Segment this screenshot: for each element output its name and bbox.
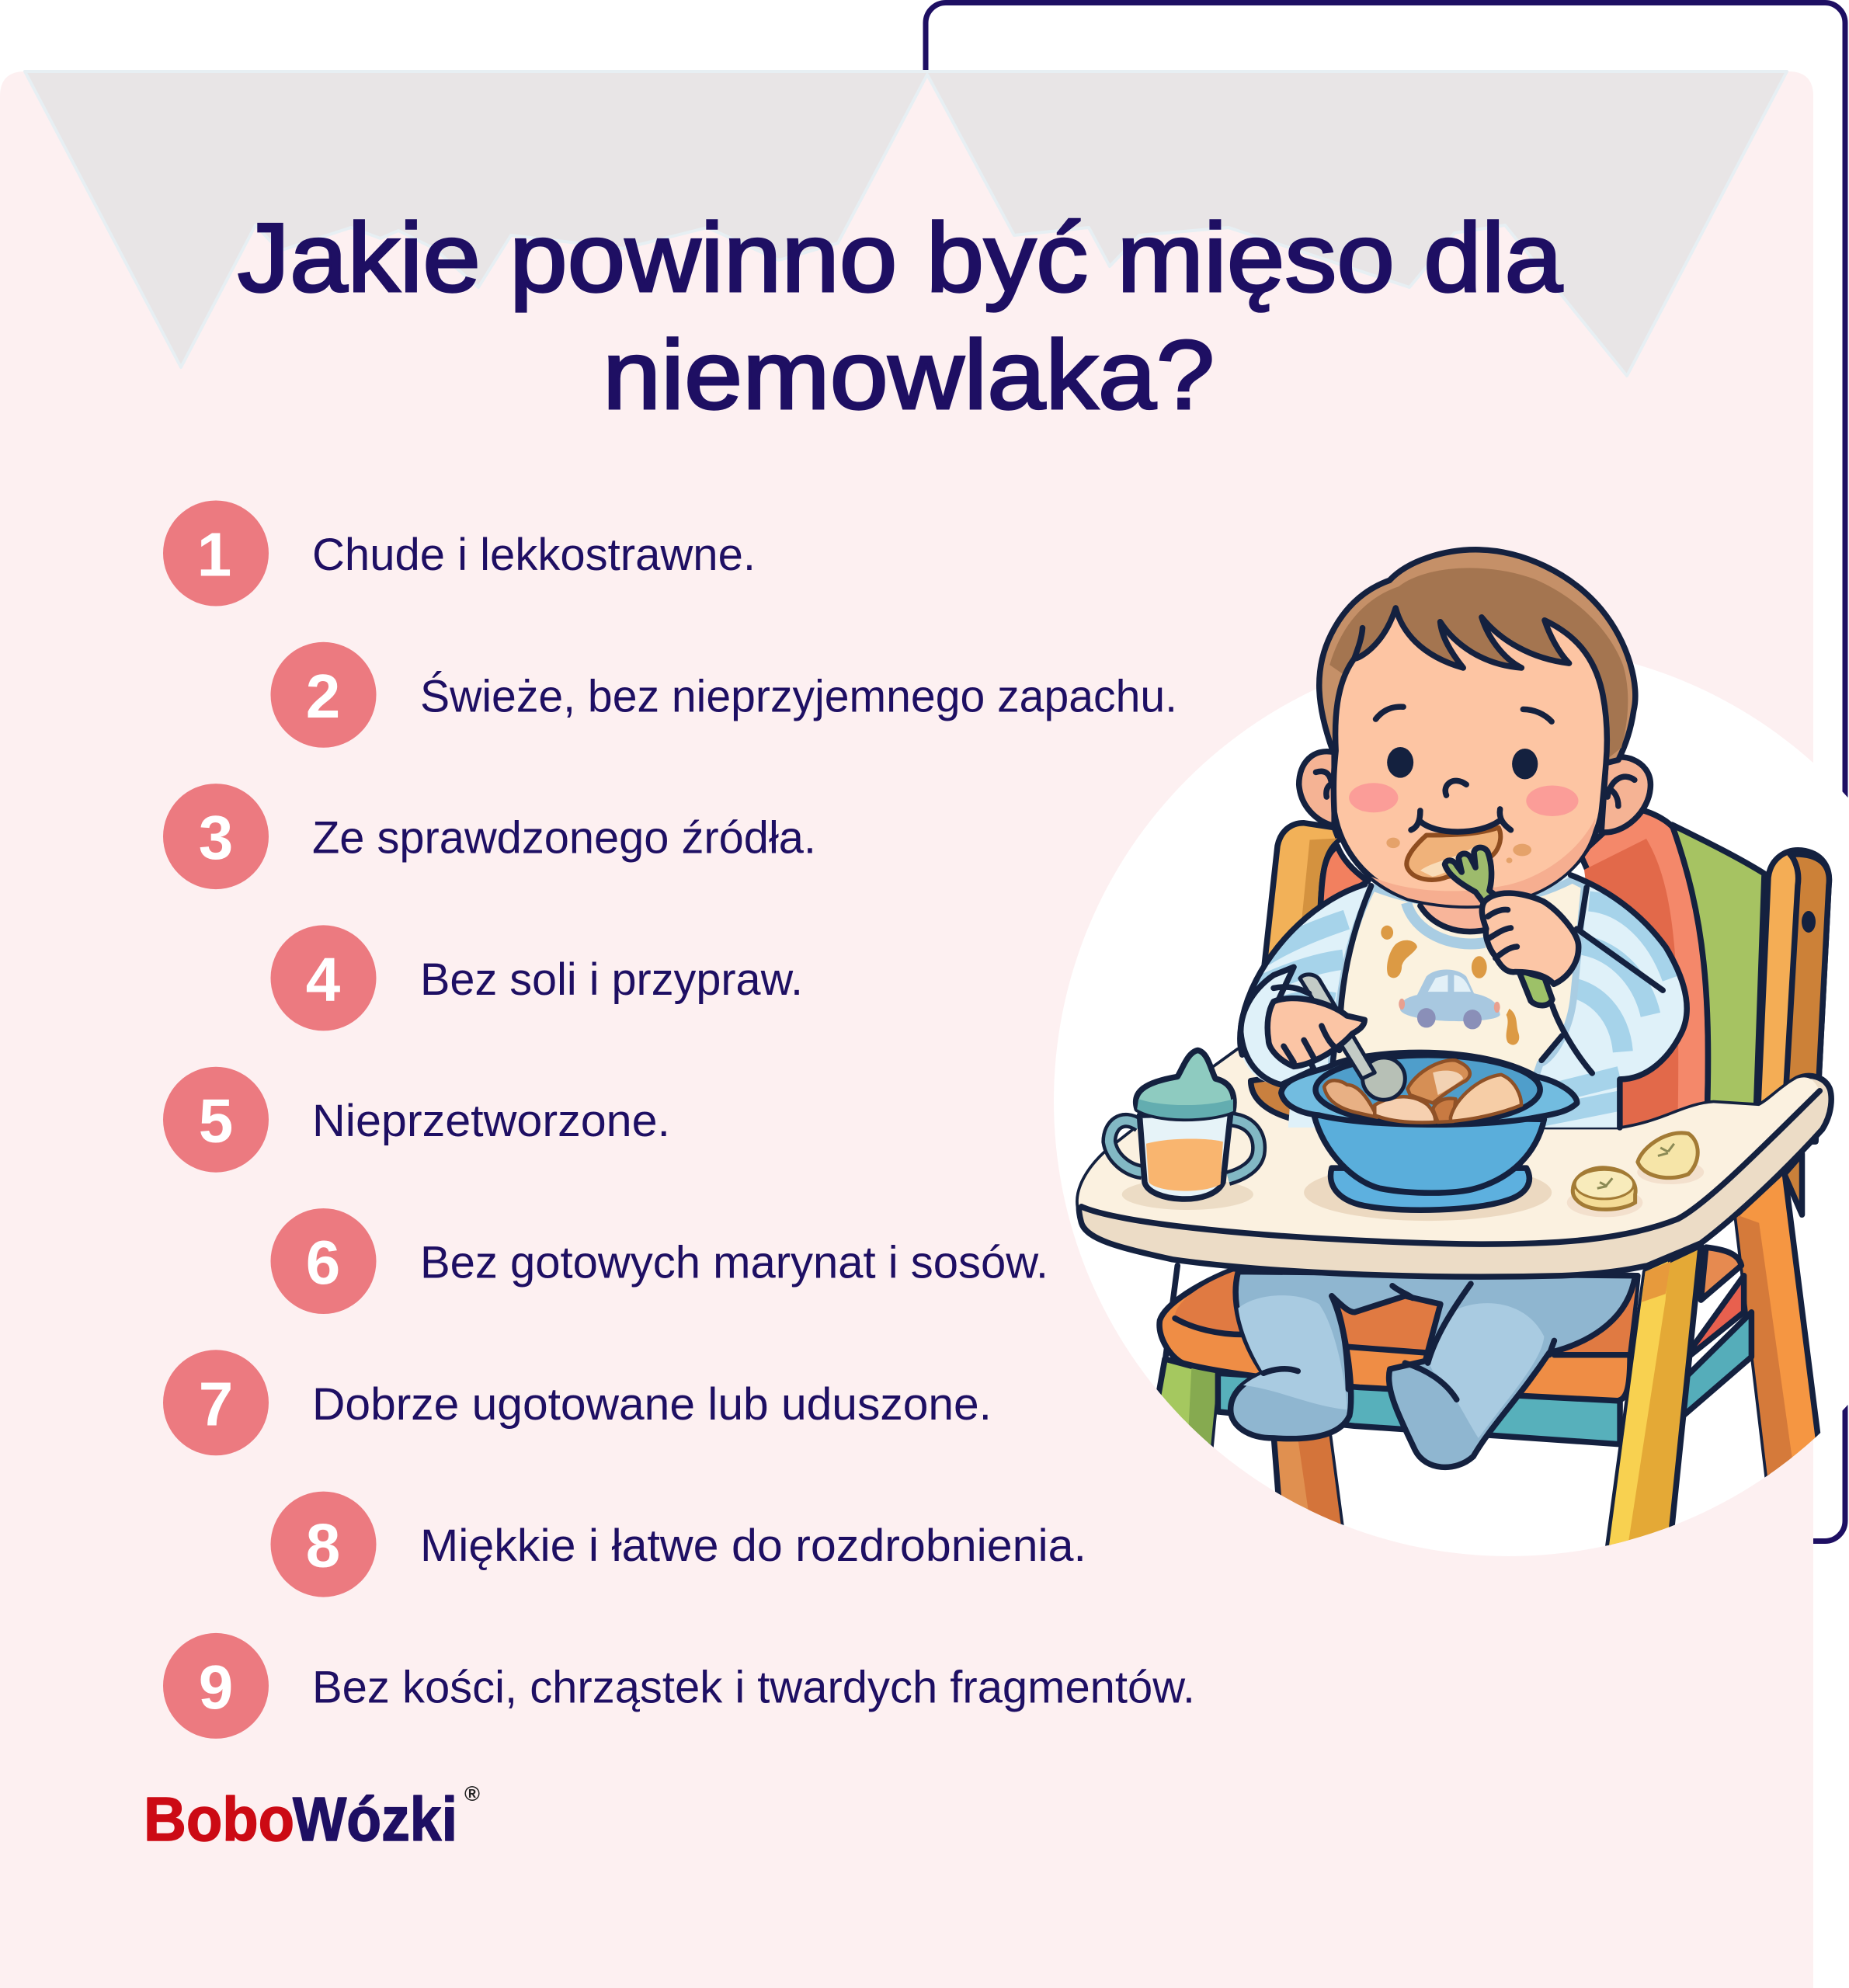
rear left leg (1157, 1266, 1218, 1451)
crumbs (1386, 838, 1531, 863)
logo: BoboWózki (144, 1782, 480, 1854)
rear right leg (1736, 1154, 1819, 1491)
bowl rim (1281, 1052, 1577, 1124)
list item 1: 1 (197, 520, 231, 589)
list item 1 (163, 500, 756, 606)
food in mouth (1406, 828, 1500, 880)
bowl base (1331, 1168, 1529, 1210)
list item 3 (163, 784, 816, 889)
tray (1079, 1050, 1831, 1277)
list item 4: Bez soli i przypraw. (420, 954, 803, 1005)
list item 4: 4 (306, 944, 341, 1013)
list item 6: Bez gotowych marynat i sosów. (420, 1238, 1048, 1288)
list item 5 (163, 1067, 670, 1173)
chair legs, seat and baby legs (1157, 1154, 1819, 1552)
list item 8: Miękkie i łatwe do rozdrobnienia. (420, 1521, 1086, 1571)
list item 9: 9 (199, 1653, 233, 1722)
list item 1: Chude i lekkostrawne. (312, 530, 756, 580)
sippy cup (1109, 1050, 1259, 1210)
eyes (1387, 747, 1413, 778)
baby head (1299, 550, 1650, 905)
title: Jakie powinno być mięso dla (238, 203, 1563, 312)
list item 4 (270, 925, 803, 1030)
face (1333, 608, 1607, 905)
meat pieces (1324, 1060, 1521, 1122)
list item 9: Bez kości, chrząstek i twardych fragmentów. (312, 1662, 1195, 1712)
illustration: baby in high chair (1079, 550, 1831, 1552)
front items on tray (1109, 967, 1704, 1221)
front left leg (1274, 1434, 1342, 1531)
list item 7: 7 (199, 1369, 233, 1438)
left sleeve (1241, 967, 1314, 1085)
logo: BoboWózki: ® (464, 1782, 480, 1806)
car on bib (1399, 970, 1500, 1029)
hand (1482, 893, 1579, 984)
chair back: right side (1580, 808, 1829, 1142)
baby legs (1231, 1271, 1635, 1467)
logo: BoboWózki: Wózki (293, 1785, 457, 1854)
side rails (1683, 1247, 1751, 1416)
bib (1328, 878, 1590, 1075)
brown booster under arm (1247, 1076, 1290, 1121)
banana slices (1567, 1133, 1704, 1217)
ears (1299, 752, 1650, 832)
cheeks (1349, 783, 1398, 812)
chin shade (1371, 818, 1595, 905)
hair tuft at fringe (1354, 628, 1363, 659)
white circle behind illustration (1054, 646, 1849, 1556)
right hand with fork (1445, 847, 1579, 1006)
chair back: left side (1263, 823, 1368, 971)
list item 9 (163, 1633, 1195, 1739)
grey triangular banner (25, 71, 1787, 376)
front right leg (1607, 1245, 1701, 1552)
eyebrows (1376, 707, 1403, 719)
logo: BoboWózki: Bobo (144, 1785, 294, 1854)
list item 7: Dobrze ugotowane lub uduszone. (312, 1379, 992, 1430)
list item 5: 5 (199, 1086, 233, 1156)
list item 3: Ze sprawdzonego źródła. (312, 813, 816, 864)
bowl shadow (1304, 1164, 1552, 1221)
list item 6 (270, 1208, 1048, 1314)
fork (1445, 847, 1497, 904)
list item 5: Nieprzetworzone. (312, 1096, 670, 1146)
list item 3: 3 (199, 803, 233, 872)
teal seat base (1218, 1373, 1620, 1444)
hair (1319, 550, 1635, 763)
left hand (1267, 987, 1364, 1066)
title: niemowlaka? (603, 320, 1215, 429)
food stains (1381, 926, 1519, 1045)
fork handle (1518, 970, 1552, 1006)
nose (1445, 780, 1466, 795)
list item 8 (270, 1492, 1086, 1597)
orange seat (1159, 1270, 1638, 1401)
list item 2: Świeże, bez nieprzyjemnego zapachu. (420, 671, 1177, 721)
mouth (1411, 809, 1511, 832)
sleeve stripes (1243, 902, 1672, 1116)
list item 6: 6 (306, 1228, 340, 1297)
spoon (1300, 975, 1405, 1100)
baby body (1240, 875, 1687, 1128)
list item 8: 8 (306, 1511, 340, 1580)
list item 7 (163, 1350, 992, 1455)
navy outline frame (926, 3, 1845, 1541)
list item 2: 2 (306, 662, 340, 731)
list item 2 (270, 642, 1177, 748)
bowl body (1314, 1115, 1544, 1193)
title (238, 203, 1563, 429)
body outline (1240, 885, 1365, 1055)
